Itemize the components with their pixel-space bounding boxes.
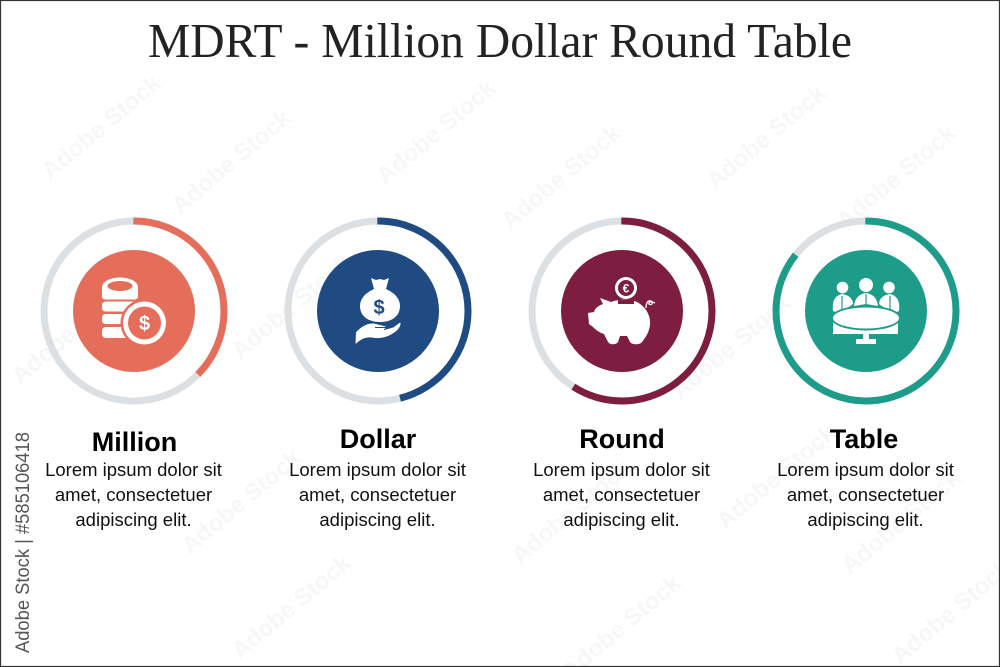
heading: Round: Round [579, 424, 665, 454]
text: Round description: adipiscing elit. [563, 509, 680, 530]
panel: Table [776, 221, 956, 530]
icon: coins: $ [139, 313, 150, 335]
text: Adobe Stock [372, 74, 502, 190]
text: Adobe Stock [832, 119, 962, 235]
icon: money bag in hand: $ [373, 297, 385, 319]
heading: Dollar: Dollar [340, 424, 417, 454]
text: Million description: Lorem ipsum dolor sit [45, 459, 222, 480]
heading: Table: Table [830, 424, 898, 454]
text: Table description: Lorem ipsum dolor sit [777, 459, 954, 480]
ring: Dollar progress [288, 221, 468, 401]
panel: Million [44, 221, 224, 530]
text: Adobe Stock [37, 69, 167, 185]
text: Adobe Stock [167, 104, 297, 220]
disc: Table [805, 250, 927, 372]
text: Table description: adipiscing elit. [807, 509, 924, 530]
disc: Round [561, 250, 683, 372]
text: Adobe Stock [227, 249, 357, 365]
text: Million description: amet, consectetuer [55, 484, 212, 505]
text: Dollar description: adipiscing elit. [319, 509, 436, 530]
disc: Dollar [317, 250, 439, 372]
text: Adobe Stock [507, 454, 637, 570]
text: Million description: adipiscing elit. [75, 509, 192, 530]
text: Adobe Stock [177, 444, 307, 560]
text: Adobe Stock [702, 79, 832, 195]
ring: Million progress [44, 221, 224, 401]
panel: Round [532, 221, 712, 530]
text: Adobe Stock [7, 274, 137, 390]
icon: piggy bank with euro coin [588, 277, 655, 344]
text: Table description: amet, consectetuer [787, 484, 944, 505]
text: Adobe Stock [227, 549, 357, 665]
panel: Dollar [288, 221, 468, 530]
text: Round description: amet, consectetuer [543, 484, 700, 505]
text: Adobe Stock [667, 289, 797, 405]
text: Dollar description: amet, consectetuer [299, 484, 456, 505]
text: Dollar description: Lorem ipsum dolor sit [289, 459, 466, 480]
ring: Table progress [776, 221, 956, 401]
disc: Million [73, 250, 195, 372]
text: Adobe Stock [497, 119, 627, 235]
icon: coins [102, 278, 168, 347]
ring: Round progress [532, 221, 712, 401]
watermark: stock id: Adobe Stock | #585106418 [13, 432, 34, 653]
text: Adobe Stock [712, 419, 842, 535]
icon: money bag in hand [355, 278, 401, 345]
text: Round description: Lorem ipsum dolor sit [533, 459, 710, 480]
icon: piggy bank with euro coin: € [623, 282, 630, 296]
icon: people at round table [831, 278, 901, 344]
title: MDRT - Million Dollar Round Table [148, 13, 852, 68]
text: Adobe Stock [837, 464, 967, 580]
heading: Million: Million [92, 427, 177, 457]
